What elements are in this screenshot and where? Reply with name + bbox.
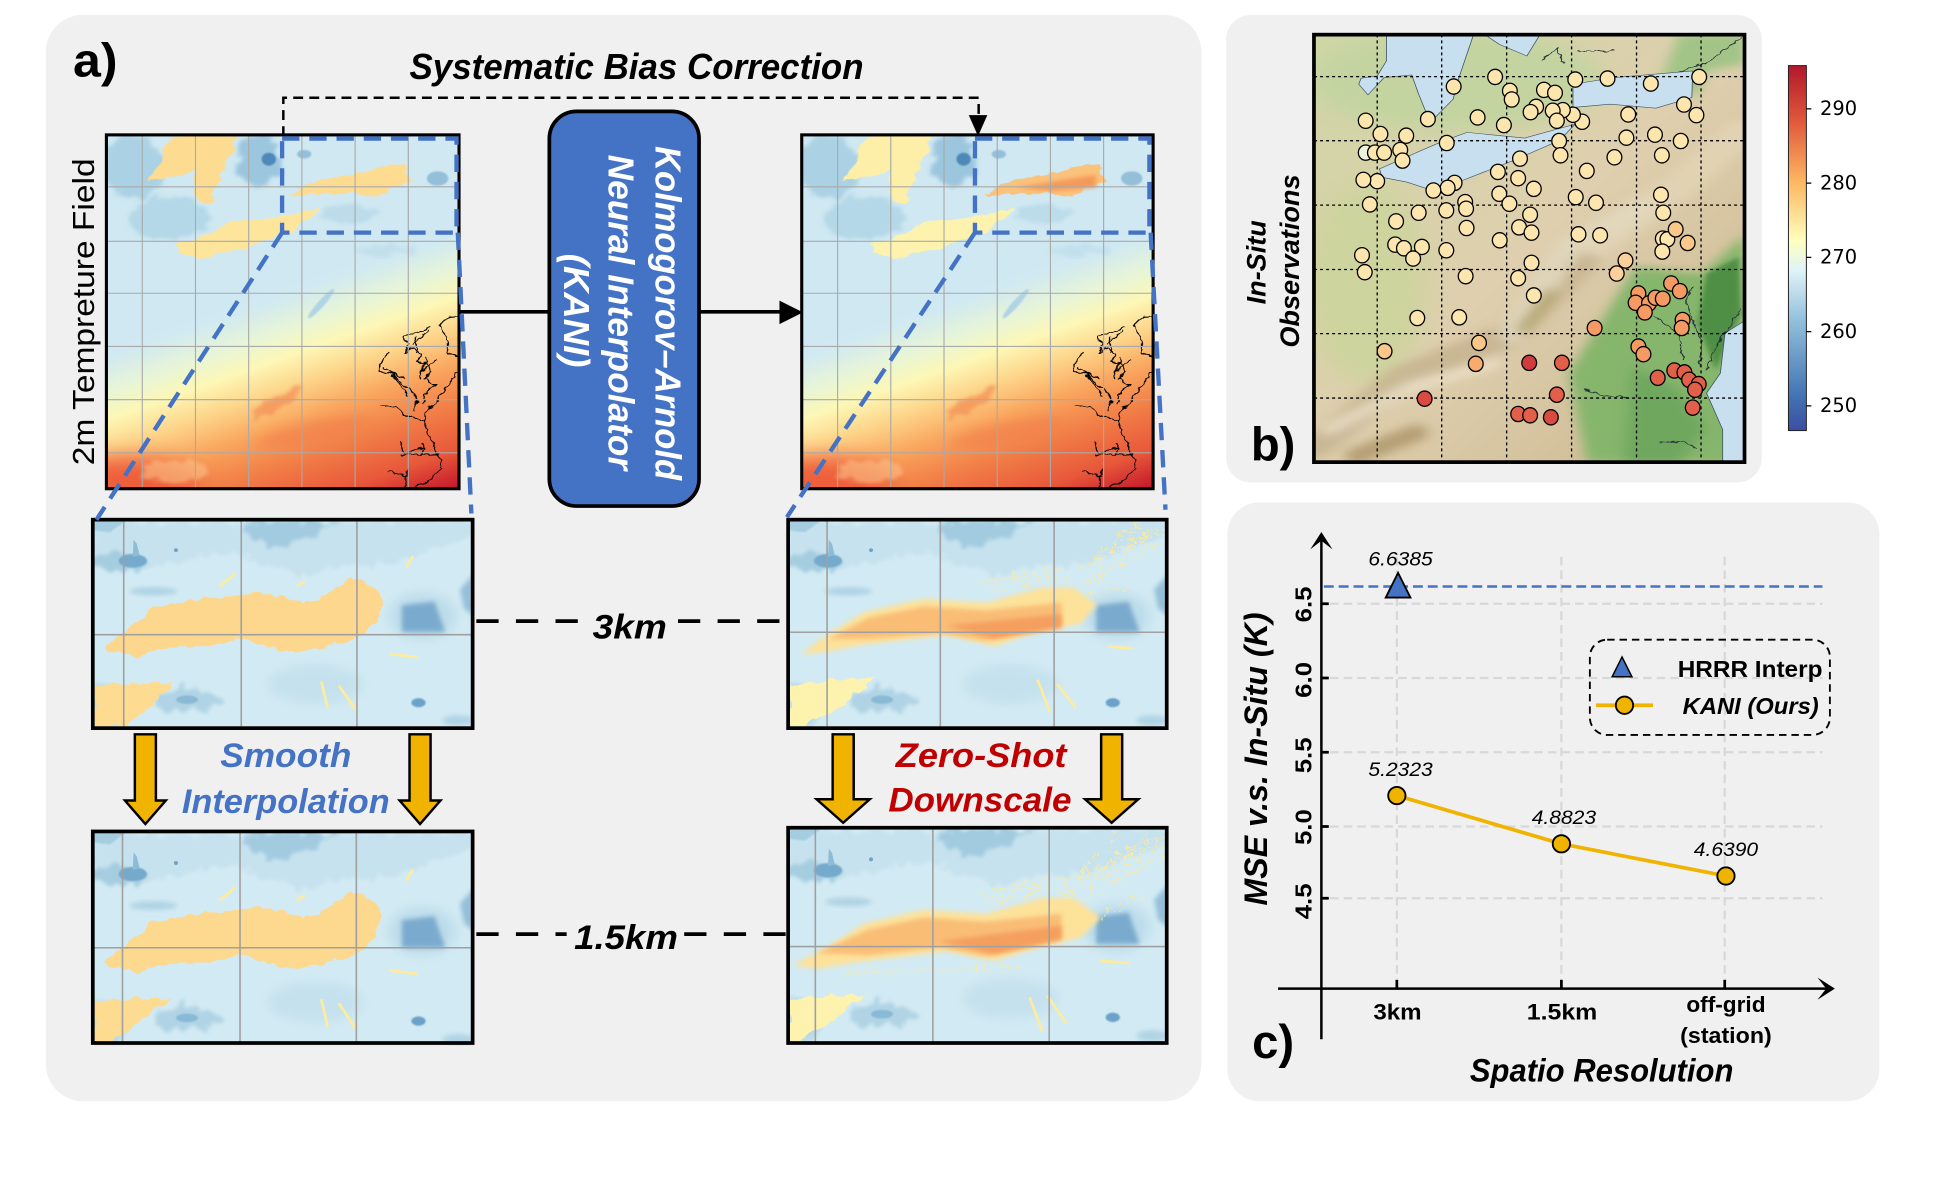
yellow arrow right 2 [1085,734,1138,823]
inset map: zero-shot 1.5km [785,828,1172,1043]
KANI box: Neural Interpolator [601,155,641,472]
heading: systematic bias correction: Systematic Bias Correction [410,47,864,87]
panel a background [46,15,1201,1101]
yellow arrow left 1 [125,734,166,824]
arrow: KANI to output [700,301,803,324]
KANI box: Kolmogorov–Arnold [648,146,688,481]
colorbar: 250 [1820,394,1857,417]
label: smooth interpolation: Interpolation [182,783,390,821]
value labels: 4.6390 [1694,839,1758,861]
yellow arrow right 1 [817,734,870,823]
label: smooth interpolation: Smooth [220,737,351,775]
y tick labels: 6.5 [1290,586,1316,622]
x tick labels [1373,992,1772,1048]
zoom indicator left [97,139,471,520]
colorbar: 290 [1820,97,1857,120]
value labels: 5.2323 [1368,759,1433,781]
lake and ocean polygons [1359,33,1746,463]
dotted graticule [1314,34,1744,462]
dashed correction arrow [283,98,987,136]
inset map: smooth 3km [89,520,474,728]
legend [1590,640,1830,735]
map: bias-corrected 2m temperature field [800,133,1155,490]
rotated axis label: 2m temperature field: 2m Tempreture Field [66,158,101,465]
arrow: input to KANI [460,310,549,313]
marker: HRRR triangle [1386,573,1410,598]
yellow arrow left 2 [400,734,440,824]
legend: HRRR Interp [1678,656,1822,682]
line chart: MSE vs in-situ [1238,532,1835,1088]
y tick labels: 5.0 [1290,809,1316,845]
KANI box: (KANI) [556,254,596,367]
panel b background [1226,15,1762,483]
panel label b: b) [1251,417,1295,470]
map: in-situ observation stations [1306,31,1746,463]
x axis title: Spatio Resolution [1470,1052,1733,1088]
panel label a: a) [73,34,118,87]
connector: 3km: 3km [593,608,667,646]
grid lines [1330,557,1822,984]
zoom indicator right [787,139,1165,517]
station markers: cool to mild [1355,69,1707,371]
connector: 1.5km: 1.5km [574,919,678,957]
label: zero-shot downscale: Downscale [888,782,1071,820]
label: zero-shot downscale [888,737,1071,820]
panel b: rotated label [1241,174,1305,348]
colorbar: 260 [1820,320,1857,343]
y tick labels: 6.0 [1290,662,1316,698]
baseline dashed reference [1324,585,1822,587]
x tick labels: (station) [1680,1023,1772,1048]
panel b: rotated label: Observations [1274,174,1305,348]
map: coarse 2m temperature field [104,133,461,490]
value labels: 4.8823 [1532,807,1596,829]
y tick labels: 5.5 [1290,737,1316,773]
legend: KANI (Ours) [1683,693,1819,719]
value labels [1368,548,1758,861]
colorbar: 270 [1820,246,1857,269]
y axis title: MSE v.s. In-Situ (K) [1238,612,1274,906]
x axis [1278,977,1835,1000]
label: smooth interpolation [182,737,390,821]
panel b: rotated label: In-Situ [1241,220,1272,304]
panel label c: c) [1252,1015,1294,1068]
y tick labels [1290,586,1316,919]
panel c background [1227,502,1879,1101]
inset map: zero-shot 3km [785,520,1172,728]
station markers: warm [1587,276,1690,362]
station markers: hot [1417,355,1706,425]
inset map: smooth 1.5km [89,831,474,1045]
x tick labels: 3km [1373,1000,1422,1025]
colorbar [1788,66,1857,431]
value labels: 6.6385 [1368,548,1434,570]
x tick labels: off-grid [1686,992,1766,1017]
x tick labels: 1.5km [1527,1000,1597,1025]
label: zero-shot downscale: Zero-Shot [895,737,1068,775]
series: KANI line [1388,787,1735,885]
y tick labels: 4.5 [1290,883,1316,919]
KANI box [549,111,699,506]
colorbar: 280 [1820,171,1857,194]
y axis [1310,532,1333,1039]
